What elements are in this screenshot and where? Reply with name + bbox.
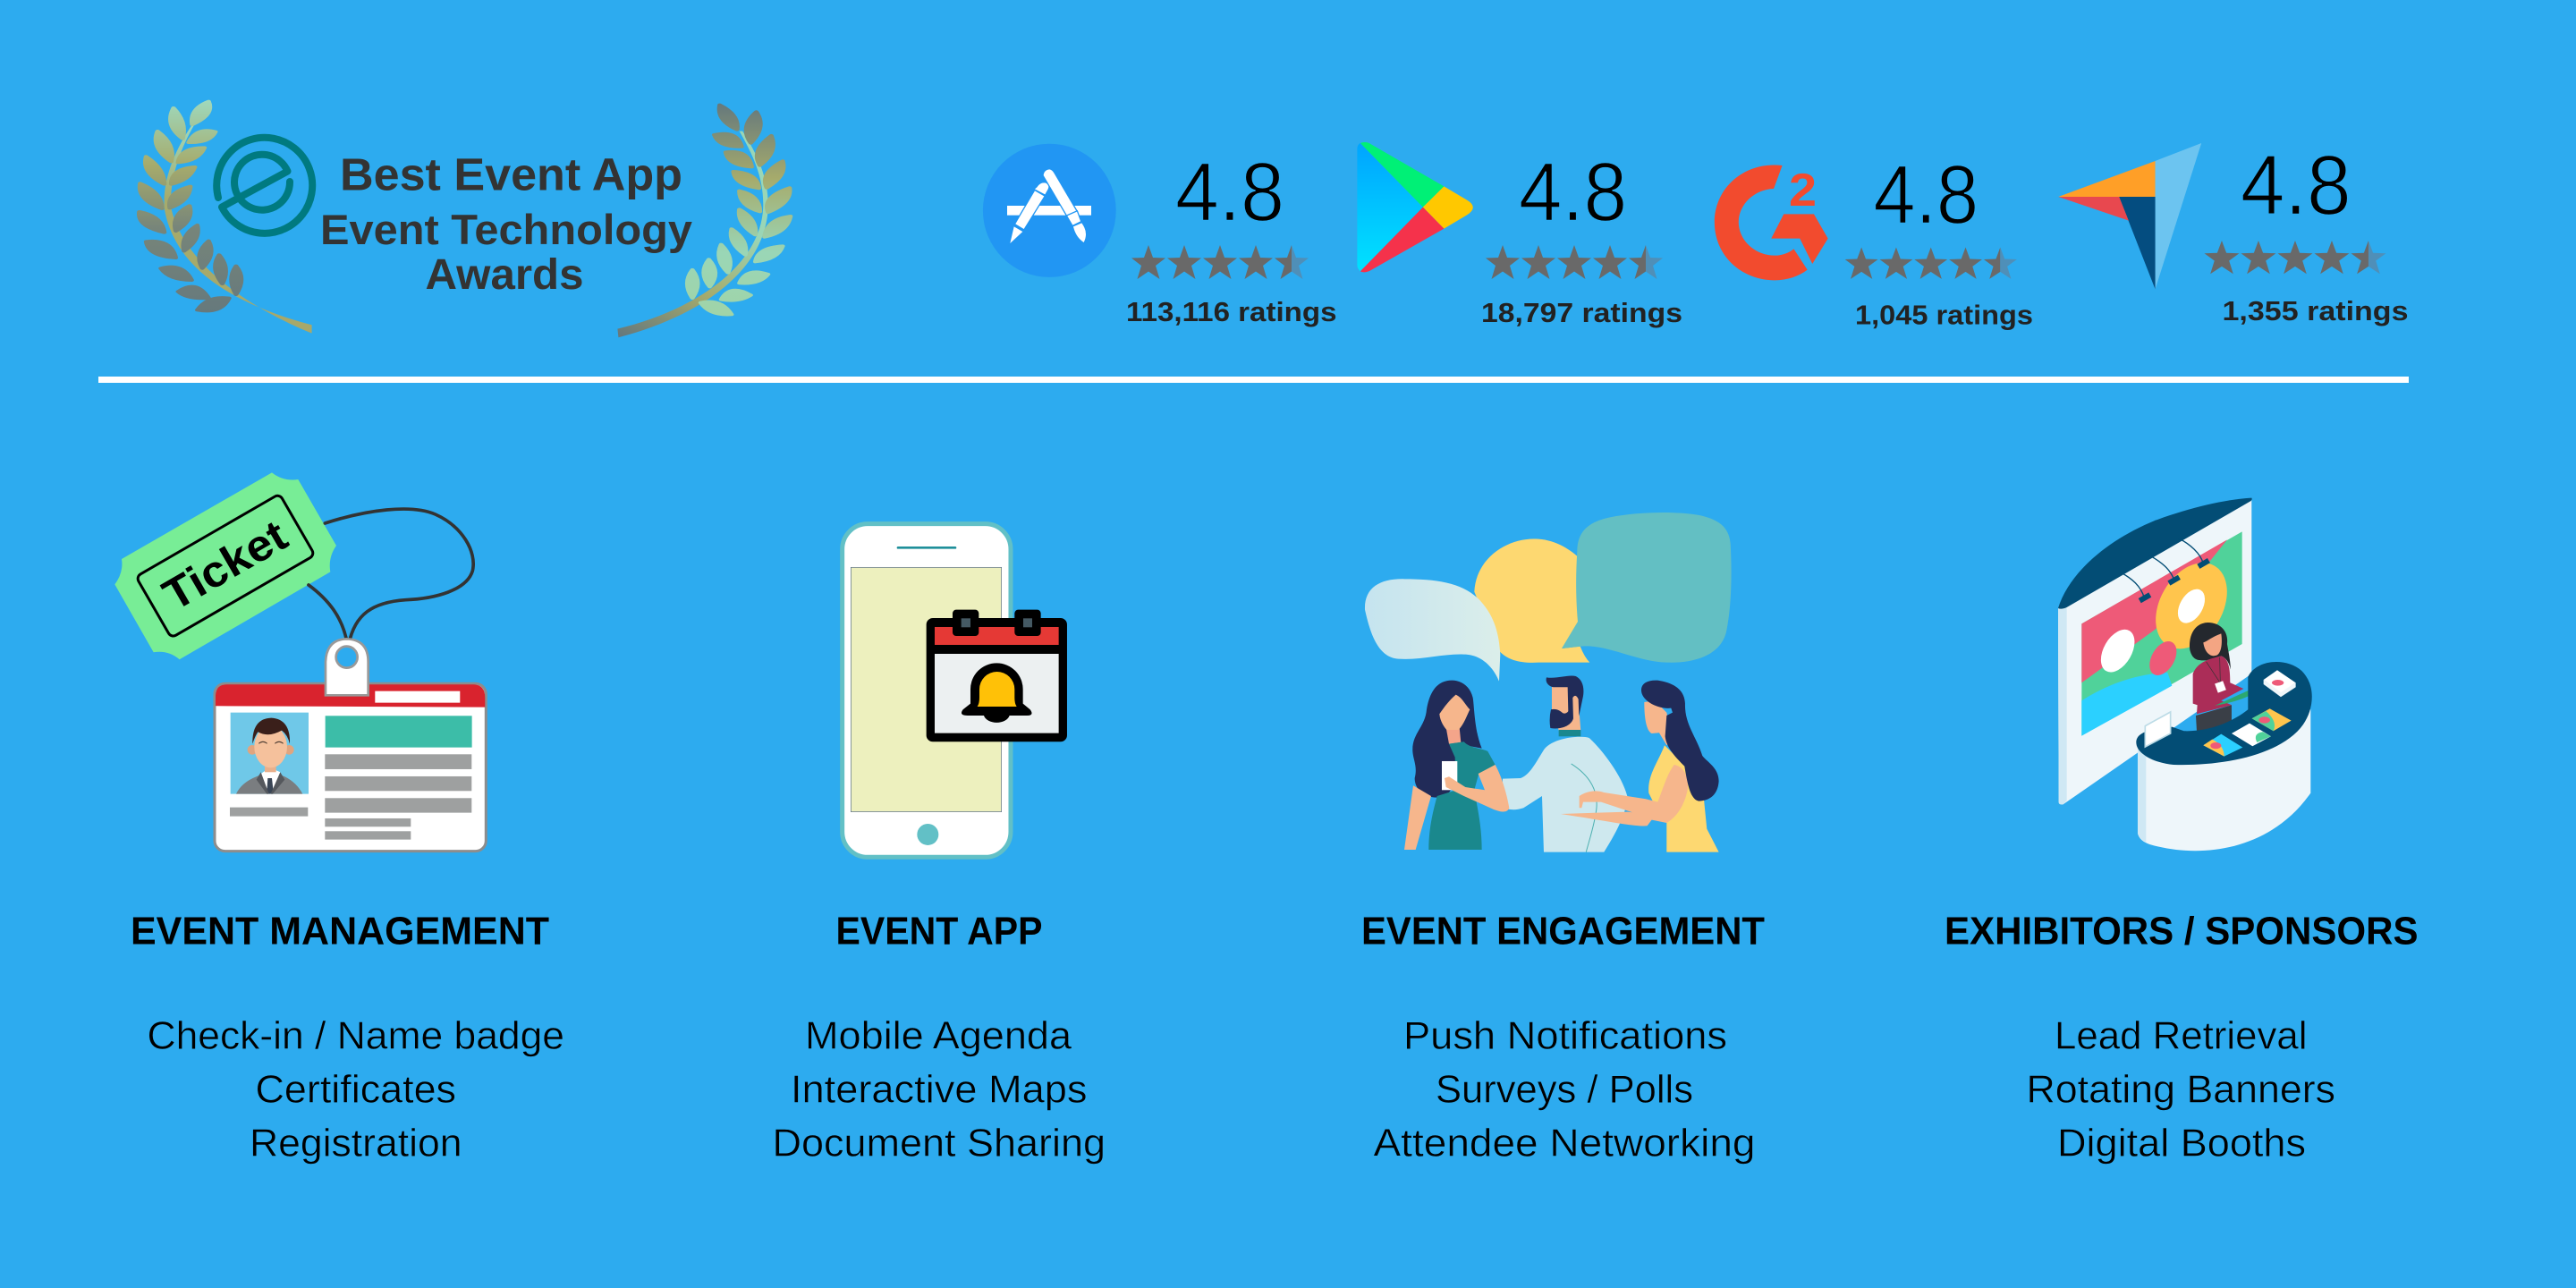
speech bubbles [1365,513,1732,682]
heading: EVENT ENGAGEMENT [1361,909,1765,953]
counter [2136,662,2312,851]
stars [1131,245,1309,279]
rating: App Store [983,144,1336,327]
icon: App Store [983,144,1116,277]
feature list: Certificates [256,1068,456,1111]
award title [320,148,692,299]
column: event app [773,909,1106,1165]
feature list [147,1014,564,1165]
column: event engagement [1361,909,1765,1165]
rating: Capterra [2058,138,2408,326]
heading: EXHIBITORS / SPONSORS [1945,909,2419,953]
woman right [1561,681,1719,852]
exhibitor woman [2184,623,2269,740]
heading: EVENT APP [835,909,1043,953]
feature list: Digital Booths [2057,1122,2306,1165]
score: 4.8 [1873,148,1979,241]
feature list: Registration [250,1122,462,1165]
column: exhibitors and sponsors [1945,909,2419,1165]
feature list: Check-in / Name badge [147,1014,564,1057]
icon: Google Play [1357,142,1473,272]
phone [843,524,1011,857]
award badge [140,101,791,337]
ratings count: 1,045 ratings [1855,299,2033,331]
feature list: Surveys / Polls [1436,1068,1693,1111]
stars [1486,245,1663,279]
icon: G2: 2 [1789,165,1817,216]
stars [2204,241,2385,274]
ticket [114,472,336,659]
feature list: Attendee Networking [1374,1122,1755,1165]
calendar bell [927,610,1067,741]
feature list: Document Sharing [773,1122,1106,1165]
award title: Event Technology [320,206,692,253]
icon: phone with calendar bell [843,524,1067,857]
icon: Capterra [2058,143,2201,289]
feature list: Rotating Banners [2027,1068,2335,1111]
ratings count: 18,797 ratings [1481,297,1682,328]
rating: Google Play [1357,142,1682,328]
ratings count: 113,116 ratings [1126,296,1336,327]
icon: G2 [1715,165,1828,280]
icon: ticket and name badge [114,472,486,852]
ratings count: 1,355 ratings [2222,295,2408,326]
feature list [773,1014,1106,1165]
feature list: Push Notifications [1403,1014,1727,1057]
feature list: Mobile Agenda [805,1014,1072,1057]
feature list [2027,1014,2335,1165]
column: event management [131,909,564,1165]
icon: left laurel [140,101,312,334]
feature list [1374,1014,1755,1165]
score: 4.8 [1175,145,1284,238]
feature list: Interactive Maps [791,1068,1088,1111]
lanyard [309,509,473,644]
stars [1845,247,2017,279]
heading: EVENT MANAGEMENT [131,909,549,953]
rating: G2 [1715,148,2033,331]
woman left [1404,681,1509,850]
award title: Awards [426,251,583,299]
icon: exhibition booth [2058,498,2312,851]
icon: e logo [216,138,312,233]
award title: Best Event App [340,148,682,200]
icon: people talking with speech bubbles [1365,513,1732,852]
booth backdrop [2058,498,2252,804]
icon: right laurel [617,105,791,337]
man [1503,676,1627,852]
ticket: Ticket [155,511,295,621]
feature list: Lead Retrieval [2055,1014,2308,1057]
score: 4.8 [2241,138,2351,233]
name badge [215,639,486,852]
score: 4.8 [1519,145,1627,238]
